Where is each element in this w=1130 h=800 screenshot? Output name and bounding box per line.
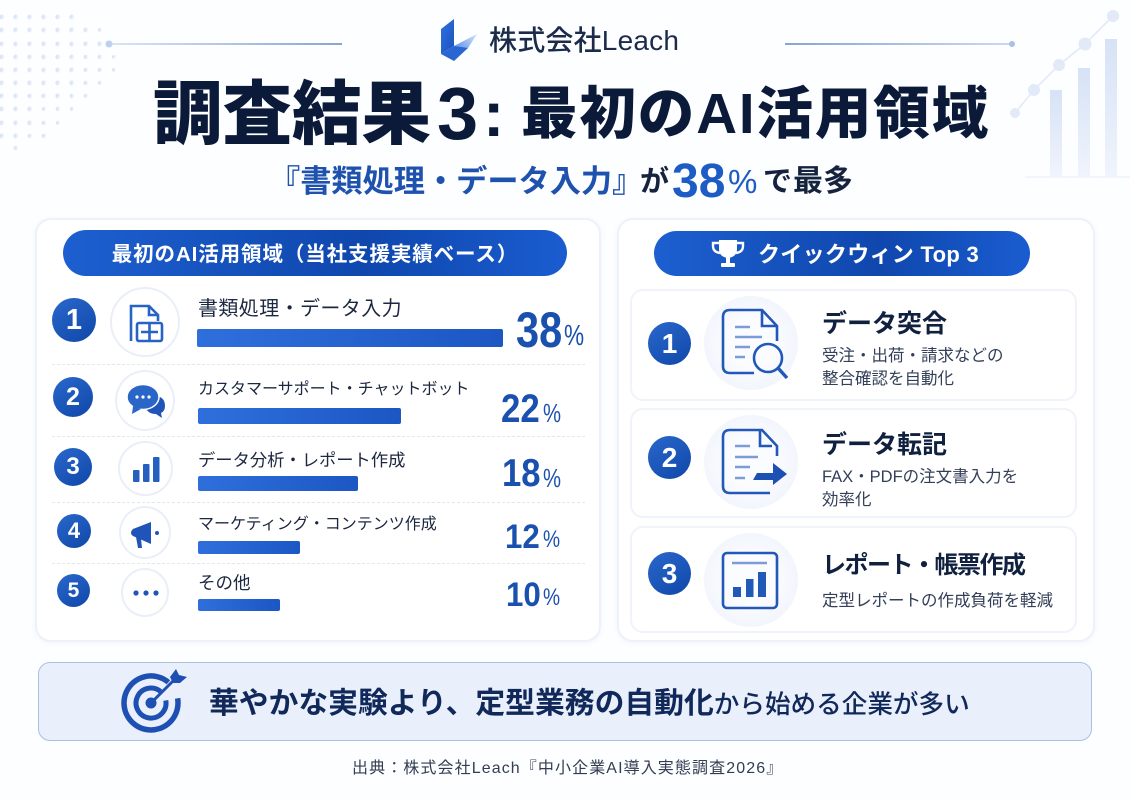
row 3 value: % — [543, 463, 561, 493]
card 1 description — [822, 346, 1004, 388]
row 1 number: 1 — [66, 304, 82, 336]
title — [153, 72, 990, 155]
row 2 bar — [198, 408, 401, 424]
row 2 icon: chat bubbles — [115, 370, 175, 431]
title: 調査結果 — [153, 75, 431, 153]
panel heading: quick wins: クイックウィン Top 3 — [758, 242, 979, 267]
card 2 description: FAX・PDFの注文書入力を — [822, 468, 1018, 486]
card 2 icon: document transfer — [704, 415, 798, 509]
quick win card 1 — [630, 289, 1077, 401]
source note: 出典：株式会社Leach『中小企業AI導入実態調査2026』 — [352, 760, 783, 777]
callout banner — [38, 662, 1092, 741]
card 3 number — [648, 552, 691, 595]
row 3 number: 3 — [66, 453, 80, 480]
row 5 label: その他 — [198, 573, 250, 593]
row 3 value: 18 — [502, 452, 541, 495]
subtitle: が — [640, 166, 669, 198]
panel heading: quick wins — [654, 231, 1030, 276]
callout text: 華やかな実験より、定型業務の自動化から始める企業が多い — [209, 687, 970, 720]
row 4 icon: megaphone — [119, 506, 171, 559]
subtitle: 『書類処理・データ入力』 — [269, 164, 643, 199]
card 3 title: レポート・帳票作成 — [822, 552, 1024, 579]
subtitle: 38 — [672, 155, 725, 208]
background chart decoration — [1010, 10, 1130, 178]
logo icon — [441, 19, 477, 61]
row 1 number — [52, 298, 96, 342]
row 5 number: 5 — [68, 579, 79, 602]
card 2 description — [822, 468, 1018, 508]
row 4 value: % — [543, 526, 560, 553]
row 4 value — [505, 518, 560, 556]
card 1 icon: document search — [704, 296, 798, 390]
row 2 value: 22 — [501, 387, 540, 431]
header line left — [106, 40, 342, 48]
row 4 label: マーケティング・コンテンツ作成 — [198, 516, 437, 533]
row 4 bar — [198, 541, 300, 554]
card 2 description: 効率化 — [822, 490, 872, 508]
row 3 icon: bar chart — [118, 441, 173, 496]
icon: trophy — [712, 240, 744, 267]
row 5 value — [506, 576, 560, 614]
subtitle: % — [728, 163, 757, 200]
row 2 label: カスタマーサポート・チャットボット — [198, 381, 470, 398]
card 3 description: 定型レポートの作成負荷を軽減 — [822, 592, 1053, 610]
panel: quick wins — [617, 218, 1095, 642]
row 1 label: 書類処理・データ入力 — [198, 298, 402, 320]
row 4 value: 12 — [505, 518, 540, 556]
row 2 number — [53, 377, 93, 417]
title: : — [483, 78, 504, 150]
row 5 value: 10 — [506, 576, 541, 614]
row 1 value — [516, 302, 584, 358]
card 2 number: 2 — [662, 442, 677, 473]
card 2 number — [648, 436, 691, 479]
panel: first AI use areas — [35, 218, 601, 642]
quick win card 2 — [630, 408, 1077, 518]
row 1 bar — [197, 329, 503, 347]
row 5 value: % — [543, 584, 560, 611]
row 3 label: データ分析・レポート作成 — [198, 450, 405, 470]
title: 3 — [437, 72, 478, 155]
row 3 bar — [198, 476, 358, 491]
row 1 icon: document table — [110, 287, 180, 357]
row 5 icon: more dots — [121, 568, 169, 617]
subtitle: 最多 — [793, 165, 853, 198]
row 4 number: 4 — [68, 518, 80, 543]
row 2 number: 2 — [66, 383, 80, 411]
row 1 value: 38 — [516, 302, 562, 358]
header line right — [785, 41, 1015, 47]
card 1 title: データ突合 — [822, 310, 947, 338]
row 1 value: % — [564, 320, 584, 352]
card 3 icon: report chart — [704, 533, 798, 627]
company name: 株式会社Leach — [489, 25, 679, 56]
row 3 number — [54, 448, 92, 486]
icon: target — [121, 669, 187, 733]
panel heading: first AI use areas: 最初のAI活用領域（当社支援実績ベース） — [112, 243, 518, 266]
subtitle — [269, 155, 853, 208]
card 1 description: 整合確認を自動化 — [822, 370, 954, 388]
row 4 number — [57, 514, 91, 548]
row 2 value: % — [543, 398, 561, 428]
card 1 description: 受注・出荷・請求などの — [822, 347, 1004, 365]
title: 最初のAI活用領域 — [521, 82, 990, 145]
row 3 value — [502, 452, 561, 495]
card 2 title: データ転記 — [822, 431, 947, 459]
card 1 number: 1 — [662, 328, 677, 359]
row 5 bar — [198, 599, 280, 611]
background dot pattern — [0, 14, 116, 150]
subtitle: で — [763, 166, 792, 198]
card 3 number: 3 — [662, 558, 677, 589]
quick win card 3 — [630, 526, 1077, 633]
row 5 number — [57, 574, 90, 607]
card 1 number — [648, 322, 691, 365]
panel heading: first AI use areas — [63, 230, 567, 276]
row 2 value — [501, 387, 561, 431]
